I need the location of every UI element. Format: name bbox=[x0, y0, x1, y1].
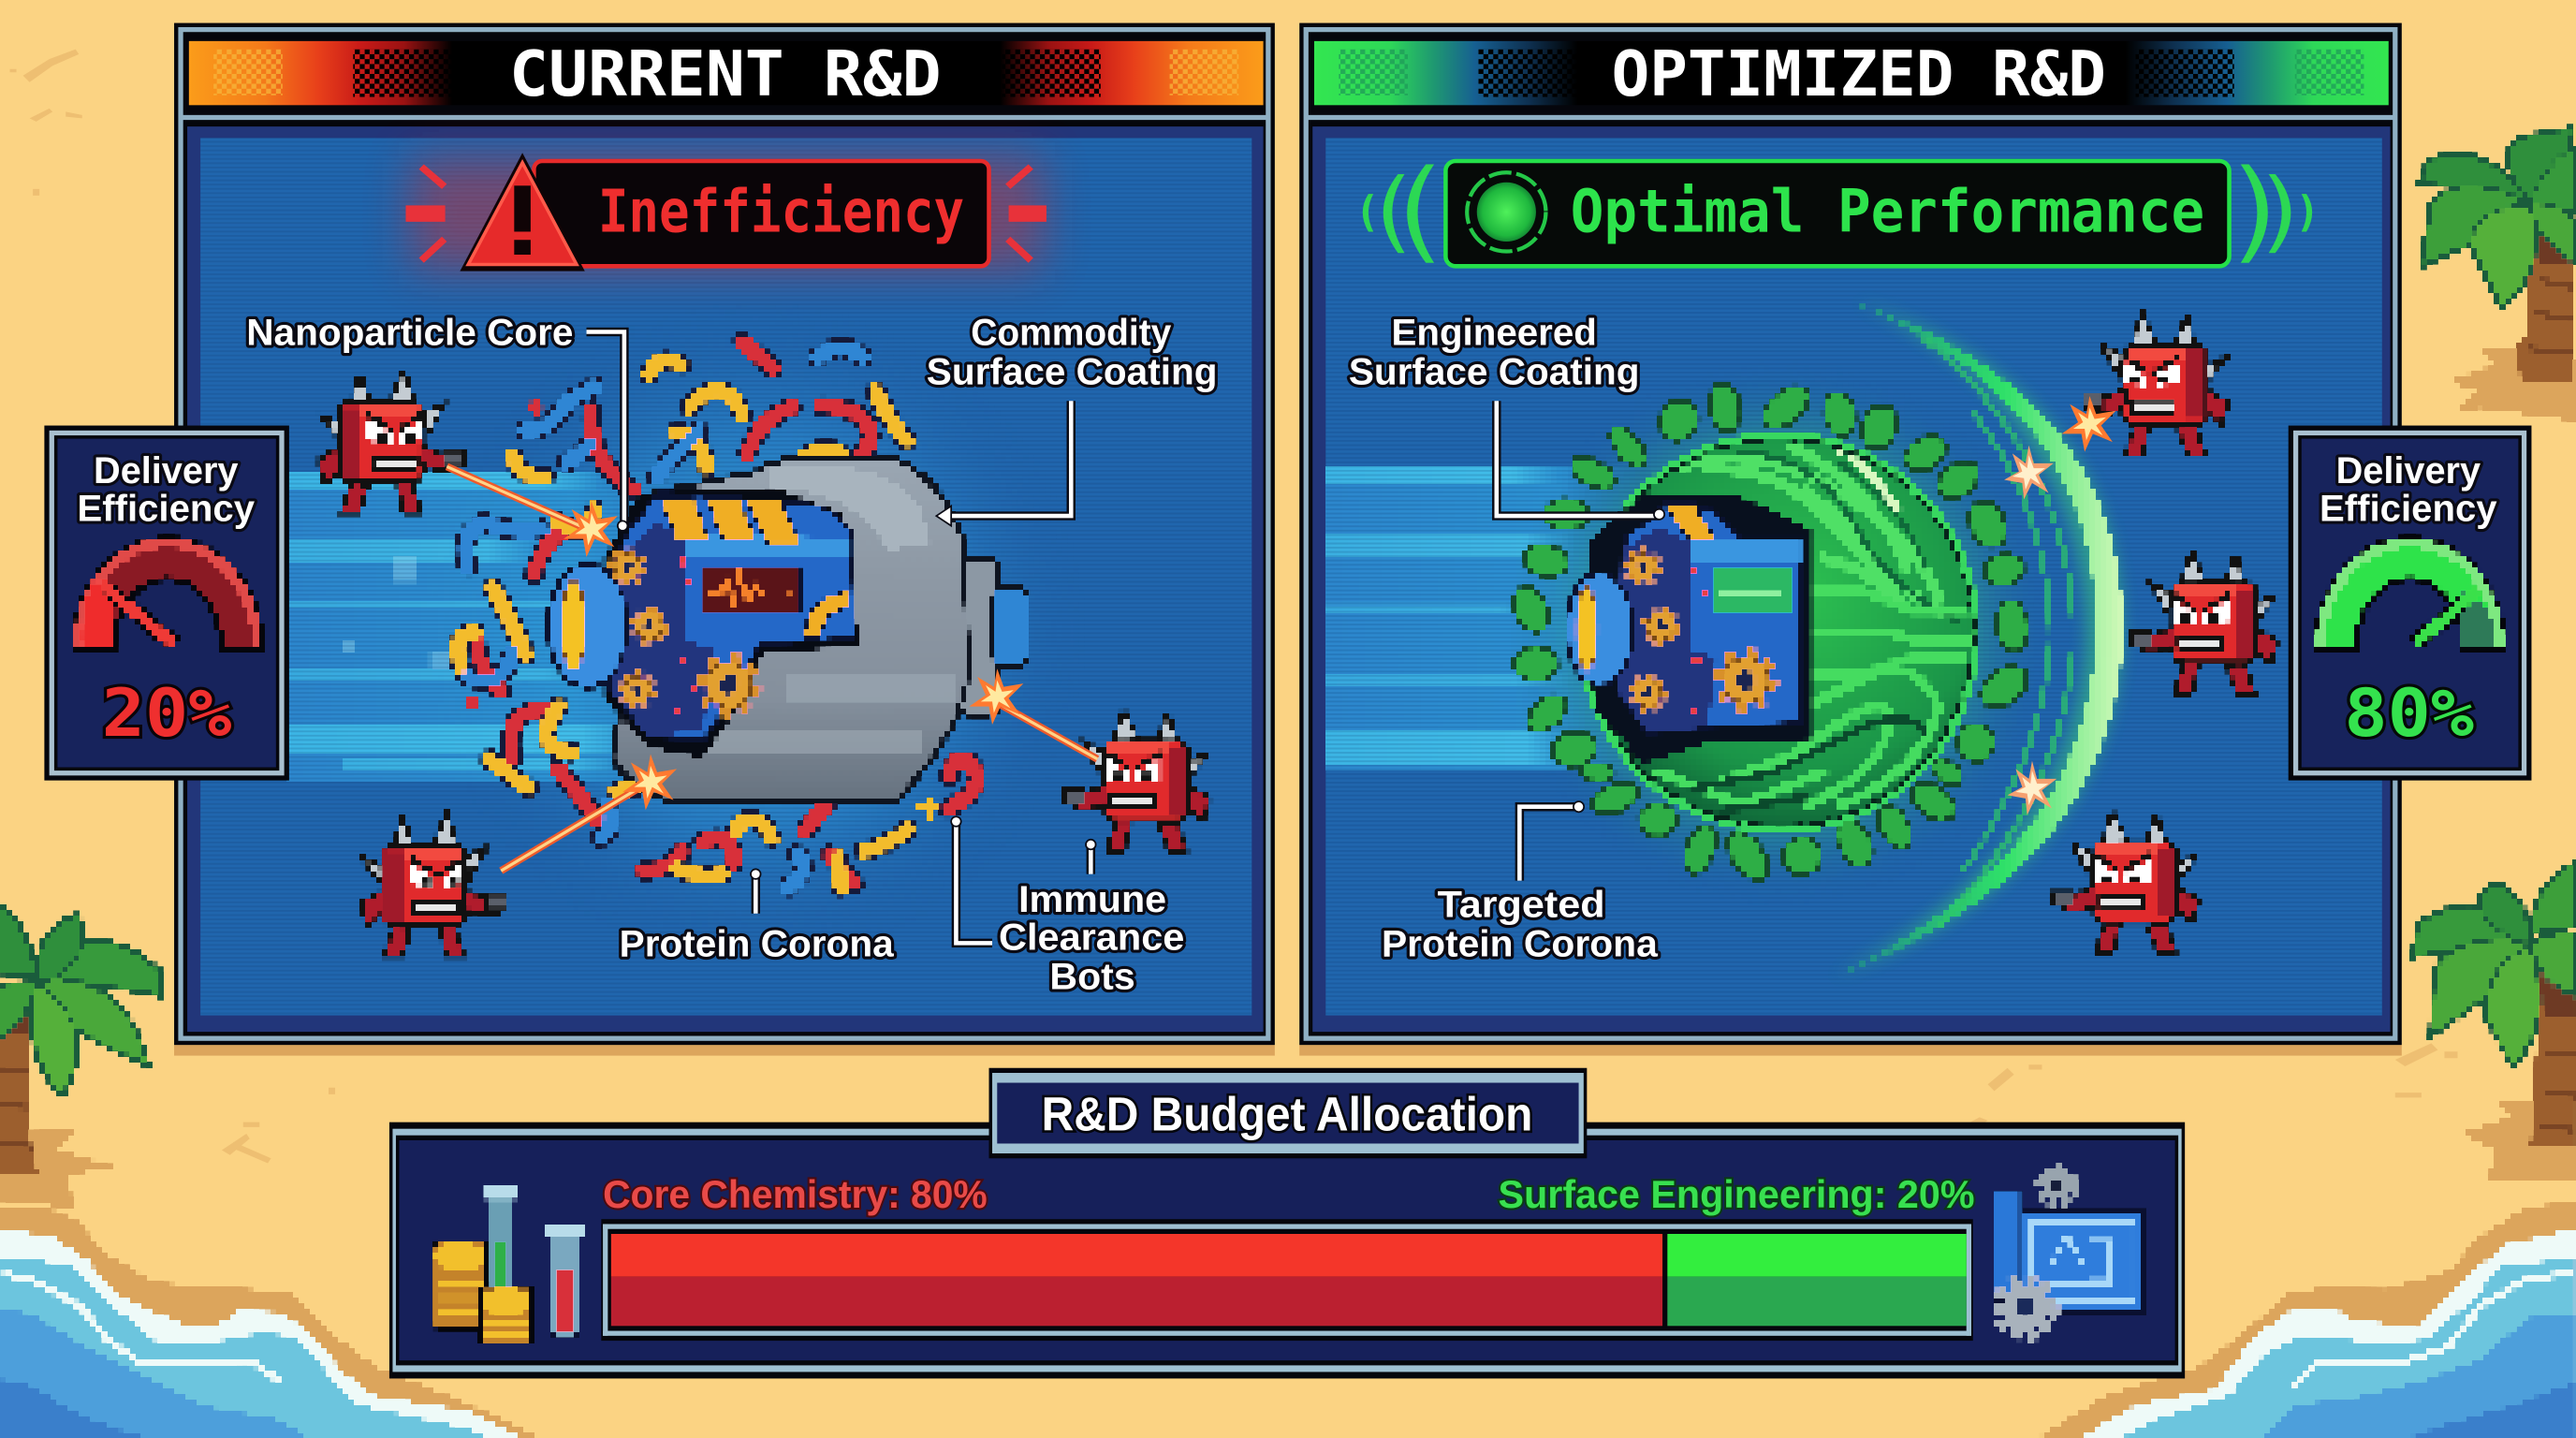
protein corona strands bbox=[458, 342, 976, 888]
gauge panel: optimized delivery efficiency: Delivery bbox=[2336, 450, 2481, 492]
callout: nanoparticle core bbox=[246, 313, 627, 531]
callout: immune clearance bots: Clearance bbox=[999, 917, 1184, 958]
warning glow bbox=[411, 157, 1043, 270]
icon: coins and test tubes bbox=[433, 1186, 583, 1343]
callout: protein corona bbox=[620, 869, 895, 964]
callout: commodity surface coating bbox=[927, 313, 1217, 526]
panel: R&D budget allocation bbox=[389, 1068, 2185, 1378]
repelled bots bbox=[2054, 314, 2276, 953]
callout: commodity surface coating: Commodity bbox=[971, 313, 1171, 354]
ticks bbox=[405, 165, 1046, 263]
shield glow bbox=[1832, 301, 2123, 977]
left shore bbox=[0, 1208, 542, 1438]
right shore bbox=[2037, 1203, 2576, 1438]
status badge bbox=[1363, 161, 2312, 266]
icon: status light bbox=[1467, 172, 1545, 252]
callout: commodity surface coating: Surface Coating bbox=[927, 352, 1217, 393]
icon: gauge 80% bbox=[2317, 539, 2504, 647]
engineered coating sphere bbox=[1579, 433, 1980, 833]
sand specks bbox=[10, 50, 2457, 1164]
laser beams bbox=[446, 466, 1097, 871]
gauge panel: optimized delivery efficiency bbox=[2289, 426, 2531, 781]
callouts bbox=[1349, 313, 1664, 964]
shield bbox=[1832, 301, 2123, 977]
signal waves bbox=[1363, 165, 2312, 263]
nanoparticle core bbox=[549, 492, 855, 740]
gauge panel: current delivery efficiency: Delivery bbox=[94, 450, 239, 492]
targeted protein corona bbox=[1508, 379, 2034, 886]
callout: immune clearance bots: Immune bbox=[1018, 879, 1166, 920]
callout: immune clearance bots bbox=[951, 816, 1184, 998]
header bar bbox=[1314, 37, 2389, 110]
callout: engineered surface coating: Engineered bbox=[1391, 313, 1597, 354]
palm top right bbox=[2420, 128, 2576, 420]
gauge panel: current delivery efficiency: Efficiency bbox=[77, 488, 255, 529]
callout: nanoparticle core: Nanoparticle Core bbox=[246, 313, 573, 354]
panel: current R&D bbox=[174, 23, 1275, 1056]
gauge panel: current delivery efficiency bbox=[44, 426, 289, 781]
badge text: Optimal Performance bbox=[1571, 176, 2204, 245]
gauge value: 80% bbox=[2344, 675, 2474, 752]
gauge value: 20% bbox=[102, 675, 231, 752]
callout: engineered surface coating bbox=[1349, 313, 1664, 520]
callout: targeted protein corona: Targeted bbox=[1438, 884, 1605, 925]
panel frame bbox=[1299, 23, 2402, 1056]
budget labels: Core Chemistry: 80% bbox=[603, 1172, 988, 1216]
badge text: Inefficiency bbox=[598, 176, 964, 245]
panel: optimized R&D bbox=[1299, 23, 2402, 1056]
callout: targeted protein corona: Protein Corona bbox=[1382, 923, 1659, 964]
sphere and shield art bbox=[1508, 301, 2276, 977]
commodity coating drum bbox=[613, 457, 969, 800]
callout: targeted protein corona bbox=[1382, 801, 1659, 964]
title: CURRENT R&D bbox=[509, 37, 942, 110]
scanlines bbox=[200, 138, 1251, 1016]
background streaks bbox=[289, 304, 1084, 961]
palm bottom left bbox=[0, 903, 161, 1208]
title tab bbox=[989, 1068, 1587, 1158]
immune clearance bots bbox=[318, 372, 1209, 956]
corona and nanoparticle bbox=[318, 342, 1209, 956]
budget labels bbox=[603, 1172, 1975, 1216]
icon: gears and blueprint bbox=[1995, 1170, 2144, 1336]
header bar bbox=[189, 37, 1264, 110]
callout: protein corona: Protein Corona bbox=[620, 923, 895, 964]
callouts bbox=[246, 313, 1217, 998]
icon: warning triangle bbox=[460, 153, 585, 271]
impact sparks bbox=[2004, 396, 2115, 814]
title tab: R&D Budget Allocation bbox=[1042, 1087, 1532, 1140]
back of drum bbox=[961, 559, 1029, 714]
budget labels: Surface Engineering: 20% bbox=[1499, 1172, 1975, 1216]
cutaway interior bbox=[605, 486, 861, 759]
palm bottom right bbox=[2413, 862, 2576, 1180]
title: OPTIMIZED R&D bbox=[1612, 37, 2106, 110]
gauge panel: optimized delivery efficiency: Efficiency bbox=[2320, 488, 2497, 529]
budget bar bbox=[601, 1219, 1973, 1341]
inefficiency badge bbox=[405, 153, 1046, 271]
callout: engineered surface coating: Surface Coating bbox=[1349, 352, 1639, 393]
icon: gauge 20% bbox=[74, 539, 261, 647]
scanlines bbox=[1325, 138, 2382, 1016]
nanoparticle core in cutaway bbox=[1567, 492, 1812, 764]
background streaks bbox=[1327, 361, 2050, 903]
callout: immune clearance bots: Bots bbox=[1049, 957, 1135, 998]
panel frame bbox=[174, 23, 1275, 1056]
